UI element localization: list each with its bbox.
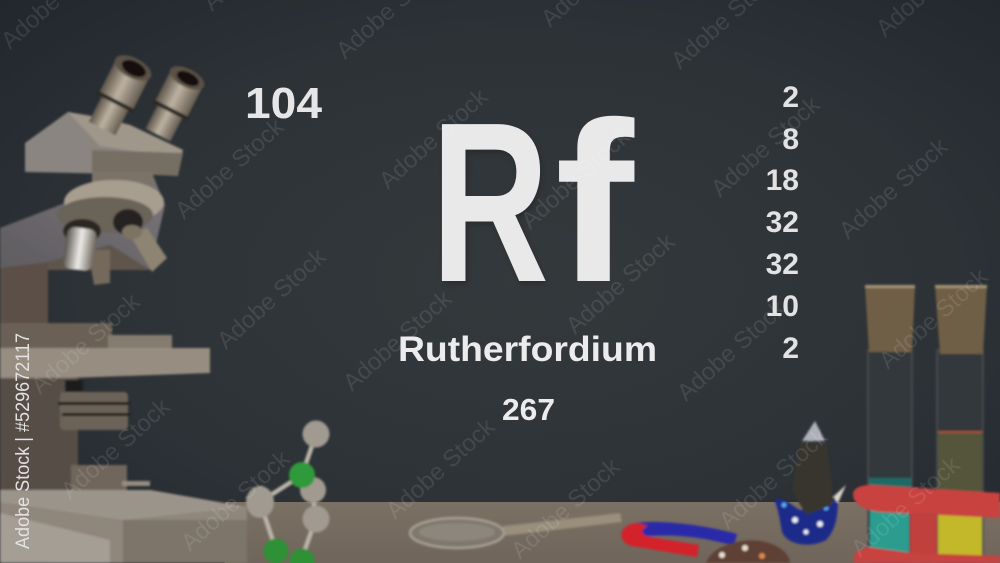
- magnifying glass: [410, 513, 622, 548]
- element symbol: f: [555, 76, 635, 330]
- eyepiece right: [141, 61, 208, 144]
- element symbol: R: [431, 76, 549, 330]
- watermark: Adobe Stock: Adobe Stock: [874, 263, 994, 374]
- crystal: [774, 421, 846, 545]
- rack: [853, 485, 1000, 518]
- microscope lamp: [58, 465, 150, 503]
- neck: [92, 172, 153, 192]
- watermark: Adobe Stock: Adobe Stock: [170, 113, 290, 224]
- microscope condenser: [58, 380, 130, 430]
- watermark: Adobe Stock: Adobe Stock: [212, 243, 332, 354]
- atomic number: 104: [245, 79, 323, 128]
- watermark: Adobe Stock: Adobe Stock: [506, 453, 626, 563]
- test tube left: [865, 285, 915, 563]
- microscope arm: [0, 168, 165, 270]
- watermark: Adobe Stock: Adobe Stock: [381, 413, 501, 524]
- watermark: Adobe Stock: Adobe Stock: [834, 133, 954, 244]
- microscope stage: [0, 323, 112, 350]
- test tube right: [935, 285, 987, 563]
- test tube rack and tubes: [853, 285, 1000, 563]
- watermark: Adobe Stock: Adobe Stock: [338, 285, 458, 396]
- atomic mass: 267: [502, 392, 555, 427]
- colored gem: [706, 540, 790, 563]
- watermark: Adobe Stock: Adobe Stock: [516, 123, 636, 234]
- watermark: Adobe Stock: Adobe Stock: [176, 445, 296, 556]
- side stock id: Adobe Stock | #529672117: [13, 333, 34, 549]
- watermark: Adobe Stock: Adobe Stock: [706, 91, 826, 202]
- molecule model: [246, 420, 330, 563]
- watermark: Adobe Stock: Adobe Stock: [26, 288, 146, 399]
- electron shell configuration: 10: [766, 290, 799, 323]
- horseshoe magnet: [621, 522, 737, 557]
- electron shell configuration: 18: [766, 164, 799, 197]
- electron shell configuration: 2: [782, 81, 799, 114]
- microscope head: [25, 112, 183, 175]
- watermark: Adobe Stock: Adobe Stock: [561, 228, 681, 339]
- microscope: [0, 50, 247, 563]
- objective lens right: [113, 209, 167, 272]
- microscope lower body: [0, 378, 78, 492]
- watermark: Adobe Stock: Adobe Stock: [672, 295, 792, 406]
- electron shell configuration: 8: [782, 123, 799, 156]
- element name: Rutherfordium: [398, 330, 657, 369]
- eyepiece left: [84, 50, 155, 138]
- watermark: Adobe Stock: Adobe Stock: [846, 451, 966, 562]
- electron shell configuration: 2: [782, 332, 799, 365]
- electron shell configuration: 32: [766, 206, 799, 239]
- watermark: Adobe Stock: Adobe Stock: [56, 393, 176, 504]
- watermark: Adobe Stock: Adobe Stock: [714, 423, 834, 534]
- nosepiece: [64, 180, 164, 224]
- table surface: [225, 502, 1000, 563]
- element symbol: R: [434, 79, 550, 333]
- electron shell configuration: [766, 81, 799, 365]
- electron shell configuration: 32: [766, 248, 799, 281]
- objective lens left: [62, 219, 110, 285]
- microscope base: [0, 490, 247, 563]
- watermark: Adobe Stock: Adobe Stock: [374, 83, 494, 194]
- microscope pillar: [0, 262, 48, 325]
